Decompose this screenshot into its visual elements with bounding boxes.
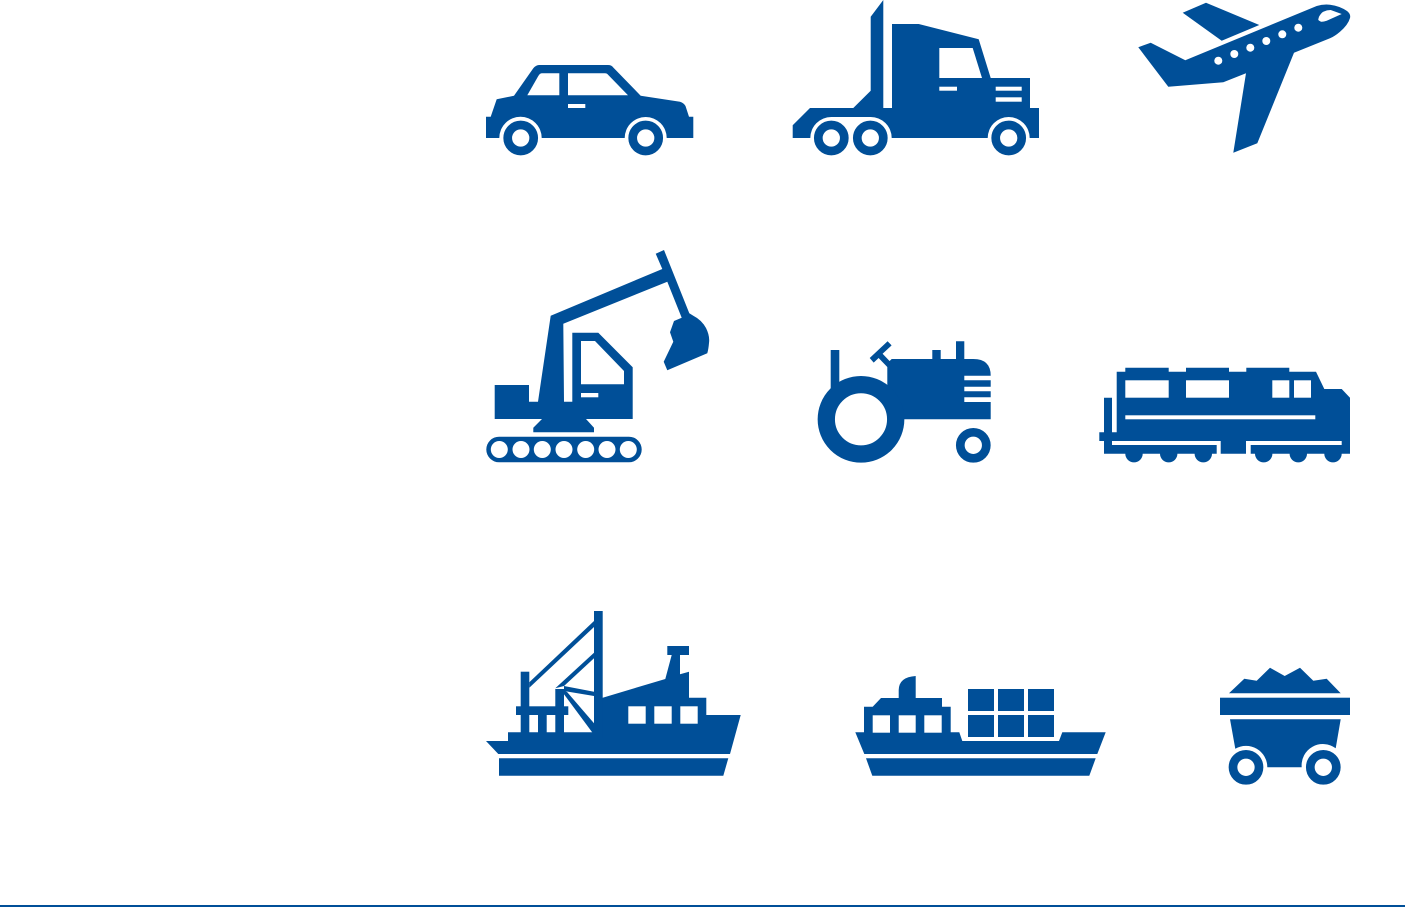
icon: airplane [1138,3,1350,153]
icon: tractor [826,341,991,458]
icon: truck [793,0,1039,151]
icon: fishing vessel [486,611,741,776]
icon: container ship [855,676,1106,776]
icon: excavator [486,250,709,462]
icon: locomotive [1099,368,1350,462]
icon: mine cart [1220,668,1350,780]
icon: car [486,65,693,151]
